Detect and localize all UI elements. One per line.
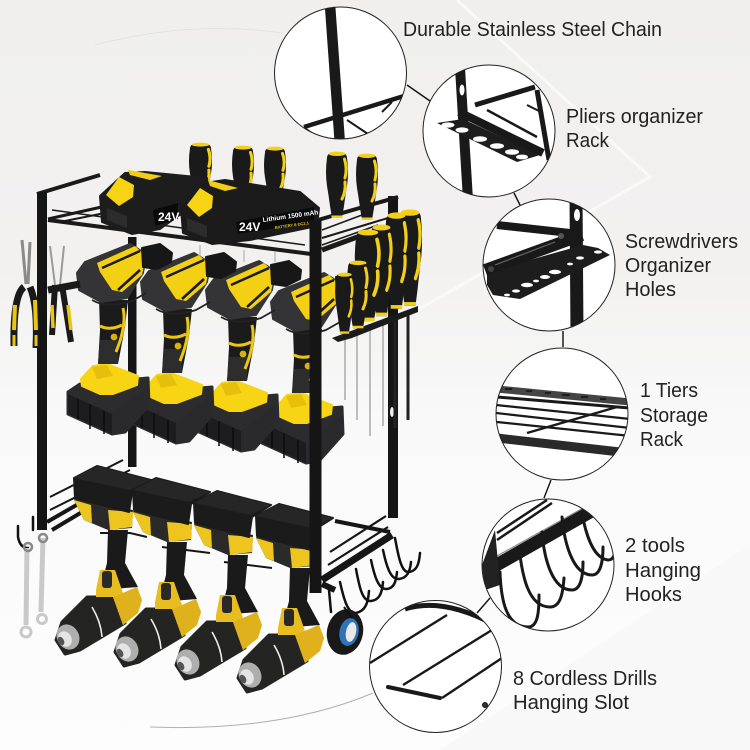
label: screwdrivers organizer holes [625, 231, 738, 301]
label: durable stainless steel chain: Durable Stainless Steel Chain [403, 19, 662, 41]
lower screwdrivers [335, 209, 422, 334]
battery 1 on top shelf: 24V [158, 210, 179, 224]
battery 2 on top shelf: Lithium 1500 mAh [262, 209, 319, 224]
pliers [14, 240, 80, 348]
label: 2 tools hanging hooks: Hooks [625, 584, 682, 606]
screwdriver plate [332, 306, 418, 342]
label: 2 tools hanging hooks: 2 tools [625, 535, 685, 557]
label: 2 tools hanging hooks: Hanging [625, 560, 701, 582]
upper drill 1 [68, 244, 172, 434]
detail circle: pliers organizer rack [423, 65, 555, 200]
detail circle: cordless drill hanging slot [370, 600, 502, 732]
detail connectors [407, 85, 563, 613]
battery 2 on top shelf [181, 180, 319, 244]
wall hooks [18, 517, 420, 613]
label: pliers organizer rack: Pliers organizer [566, 106, 703, 128]
label: pliers organizer rack [566, 106, 703, 152]
rack and stored tools [14, 143, 422, 692]
top screwdrivers [189, 143, 378, 220]
lower drill 4 [234, 504, 333, 692]
lower drill 2 [111, 478, 210, 666]
battery 2 on top shelf: 24V [239, 220, 260, 234]
rack rear posts [128, 196, 398, 518]
upper drill 3 [197, 261, 301, 451]
lower drill 3 [172, 491, 271, 679]
detail circle: screwdriver holes [483, 195, 615, 335]
top shelf wires [37, 175, 398, 254]
label: 2 tools hanging hooks [625, 535, 701, 606]
label: 8 cordless drills hanging slot [513, 668, 657, 714]
label: 8 cordless drills hanging slot: Hanging Slot [513, 692, 629, 714]
detail circle: stainless steel chain [274, 5, 406, 145]
label: 1 tiers storage rack: 1 Tiers [640, 380, 698, 402]
curved connector from slot detail [150, 693, 373, 728]
tape roll [323, 606, 367, 658]
label: 1 tiers storage rack: Rack [640, 429, 684, 451]
detail circle: storage rack [496, 348, 630, 480]
detail circle: hanging hooks [482, 499, 615, 631]
wrenches [21, 534, 47, 637]
label: screwdrivers organizer holes: Organizer [625, 255, 711, 277]
lower drill 1 [52, 466, 151, 654]
lower shelf wires [47, 460, 392, 590]
screwdriver blades [200, 245, 408, 436]
label: 1 tiers storage rack [640, 380, 708, 451]
label: pliers organizer rack: Rack [566, 130, 610, 152]
upper drill 2 [132, 253, 236, 443]
label: 1 tiers storage rack: Storage [640, 405, 708, 427]
upper drill 4 [262, 273, 366, 463]
rack front posts [37, 192, 322, 593]
label: screwdrivers organizer holes: Screwdrivers [625, 231, 738, 253]
battery 2 on top shelf: BATTERY 8-DC2.1 [274, 220, 310, 230]
battery 1 on top shelf [100, 170, 209, 234]
label: screwdrivers organizer holes: Holes [625, 279, 676, 301]
label: 8 cordless drills hanging slot: 8 Cordless Drills [513, 668, 657, 690]
